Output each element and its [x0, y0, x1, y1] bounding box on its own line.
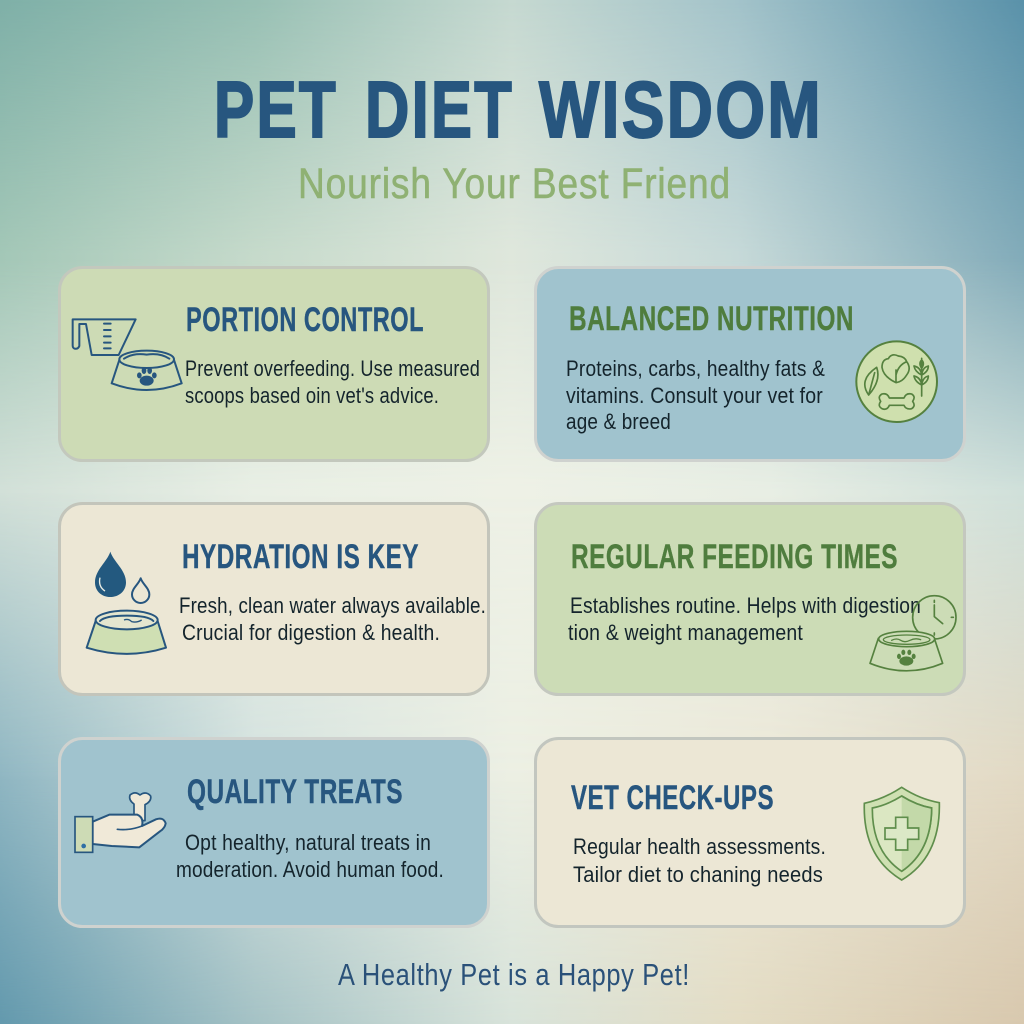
panel: hydration — [60, 504, 488, 694]
text: balanced nutrition: vitamins. Consult your vet for — [566, 383, 823, 408]
text: portion control: scoops based oin vet's advice. — [185, 383, 439, 408]
heading: vet check-ups: VET CHECK-UPS — [571, 779, 774, 817]
text: quality treats: Opt healthy, natural treats in — [185, 830, 431, 855]
text: quality treats — [176, 830, 444, 882]
heading: regular feeding times: REGULAR FEEDING TIMES — [571, 538, 898, 576]
title — [214, 65, 823, 154]
icon: hand with bone — [75, 793, 166, 852]
panel: quality treats — [60, 738, 488, 926]
title: DIET — [365, 65, 514, 154]
title: WISDOM — [539, 65, 823, 154]
footer tagline: A Healthy Pet is a Happy Pet! — [338, 957, 690, 992]
heading: balanced nutrition: BALANCED NUTRITION — [569, 300, 854, 338]
text: hydration — [179, 593, 486, 645]
title: PET — [214, 65, 338, 154]
text: quality treats: moderation. Avoid human food. — [176, 857, 444, 882]
text: portion control: Prevent overfeeding. Use measured — [185, 356, 480, 381]
heading: portion control: PORTION CONTROL — [186, 301, 424, 339]
text: balanced nutrition: Proteins, carbs, healthy fats & — [566, 356, 825, 381]
panel: portion control — [60, 268, 488, 460]
panel: balanced nutrition — [536, 268, 964, 460]
text: balanced nutrition: age & breed — [566, 409, 671, 434]
text: vet check-ups: Regular health assessments. — [573, 834, 826, 859]
text: regular feeding times — [568, 593, 921, 645]
icon: food circle — [856, 341, 937, 422]
icon: measuring cup and bowl — [73, 319, 182, 390]
text: balanced nutrition — [566, 356, 825, 434]
text: hydration: Fresh, clean water always available. — [179, 593, 486, 618]
text: hydration: Crucial for digestion & health. — [182, 620, 440, 645]
icon: clock and bowl — [870, 596, 956, 671]
panel: regular feeding times — [536, 504, 964, 694]
heading: hydration: HYDRATION IS KEY — [182, 538, 419, 576]
text: portion control — [185, 356, 480, 408]
text: vet check-ups — [573, 834, 826, 887]
heading: quality treats: QUALITY TREATS — [187, 773, 403, 811]
panel: vet check-ups — [536, 738, 964, 926]
text: regular feeding times: Establishes routine. Helps with digestion — [570, 593, 921, 618]
icon: shield with cross — [864, 787, 939, 880]
text: vet check-ups: Tailor diet to chaning needs — [573, 862, 823, 887]
subtitle: Nourish Your Best Friend — [298, 160, 731, 208]
icon: water drops and bowl — [87, 552, 166, 654]
text: regular feeding times: tion & weight management — [568, 620, 803, 645]
